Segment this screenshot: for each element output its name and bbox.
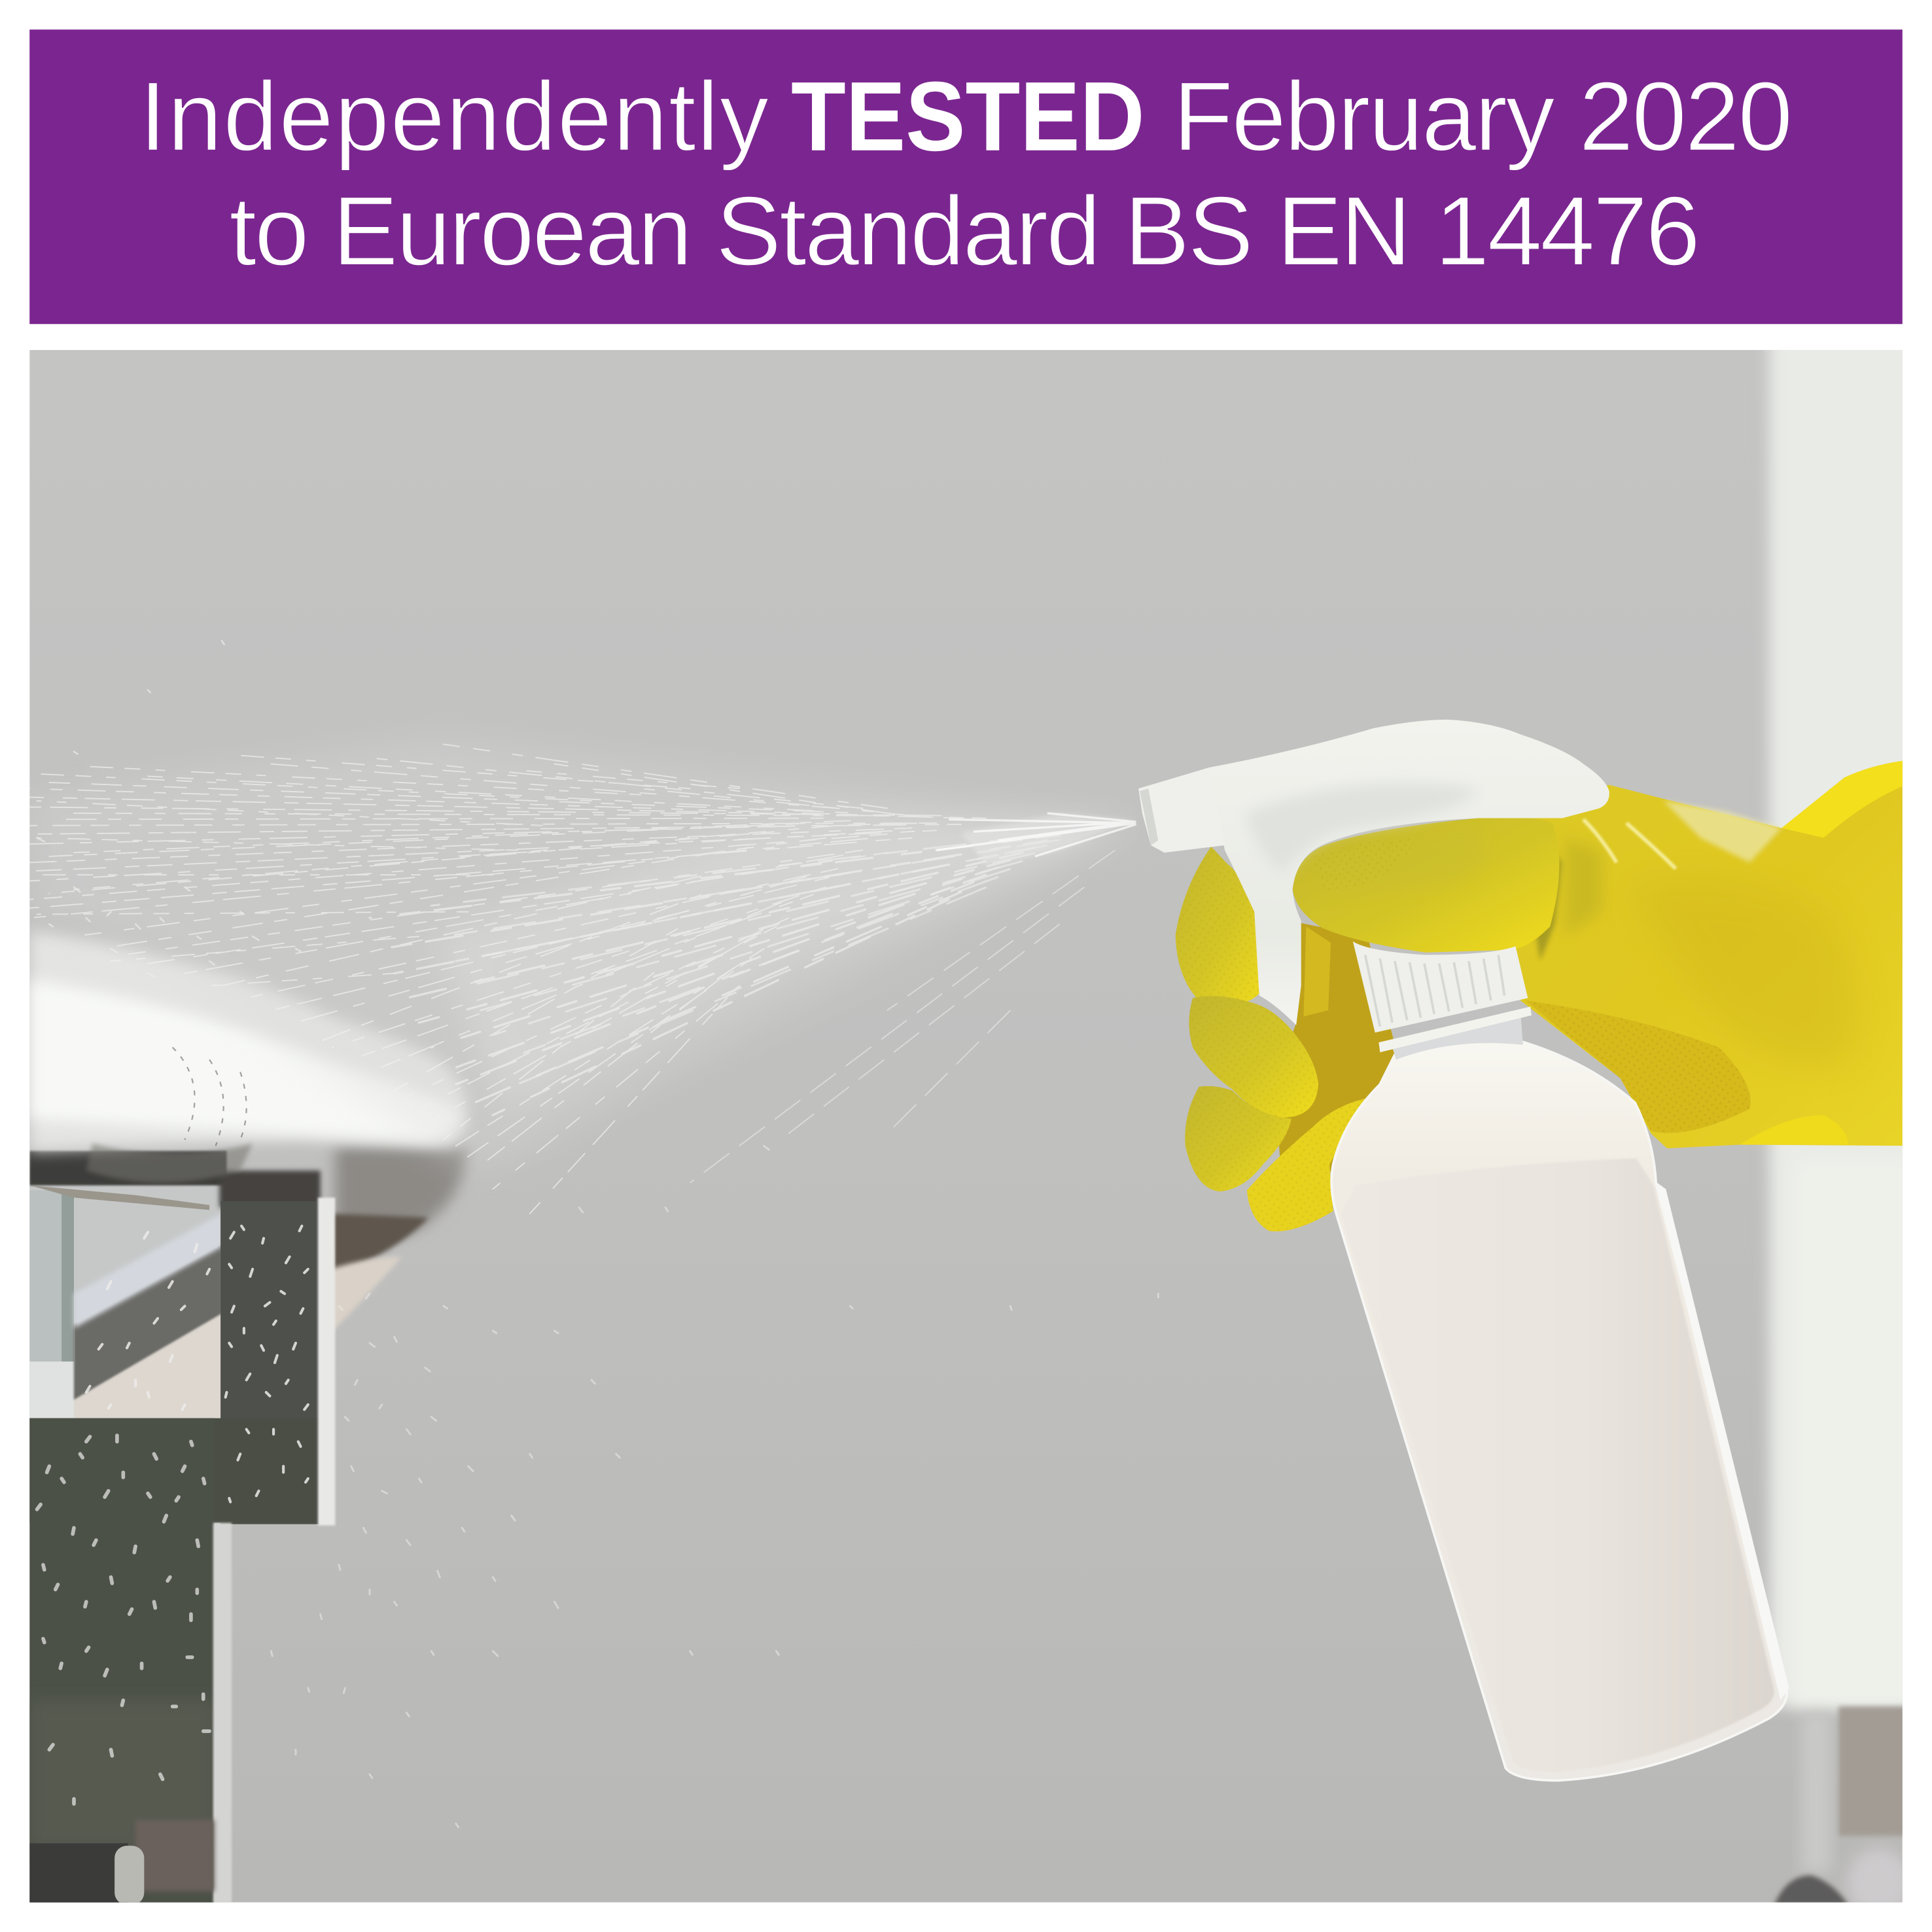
white plate edge (318, 1198, 335, 1526)
window opening (29, 1186, 220, 1292)
shaded glove folds (1626, 879, 1856, 1066)
glove sleeve (1509, 759, 1922, 1148)
spray cone (29, 737, 1136, 1214)
heading line 1: TESTED (791, 61, 1145, 171)
cream underside (334, 1255, 400, 1328)
wet surface highlight (29, 930, 467, 1183)
heading line 1 (139, 61, 1793, 171)
inner dark palm (1275, 922, 1399, 1183)
thumb (1176, 847, 1267, 1007)
ring finger (1185, 1086, 1291, 1191)
pale highlight on the glove back (1663, 801, 1782, 862)
bottle body (1331, 1039, 1787, 1780)
banner: purple heading (29, 29, 1903, 324)
heading line 1: February 2020 (1173, 61, 1793, 171)
index finger (1293, 817, 1559, 953)
dark band (29, 1151, 227, 1186)
water droplets (37, 641, 1158, 1827)
bottle lower panel (1341, 1158, 1774, 1772)
nozzle (1138, 767, 1225, 852)
bottle neck (1392, 1010, 1523, 1060)
screw cap (1353, 941, 1528, 1032)
textured glove palm (1526, 1000, 1751, 1133)
bottom cylinder (135, 1820, 215, 1891)
cap collar (1379, 1007, 1532, 1052)
middle finger (1189, 996, 1318, 1117)
heading line 1: Independently (139, 61, 769, 171)
steel counter and brackets (29, 1146, 467, 1905)
shadow under the surface (335, 1146, 467, 1247)
heading line 2: to Euroean Standard BS EN 14476 (229, 176, 1700, 286)
trigger sprayer head (1138, 720, 1609, 1025)
right plate (220, 1201, 319, 1524)
lower plate (29, 1418, 215, 1904)
spray streaks (29, 745, 1084, 1214)
spray jet core (961, 813, 1135, 865)
window light on the right (1763, 350, 1903, 1903)
spray bottle (1138, 720, 1789, 1780)
gloved hand (1176, 759, 1922, 1231)
little finger (1247, 1097, 1375, 1231)
brown underside (330, 1214, 429, 1276)
